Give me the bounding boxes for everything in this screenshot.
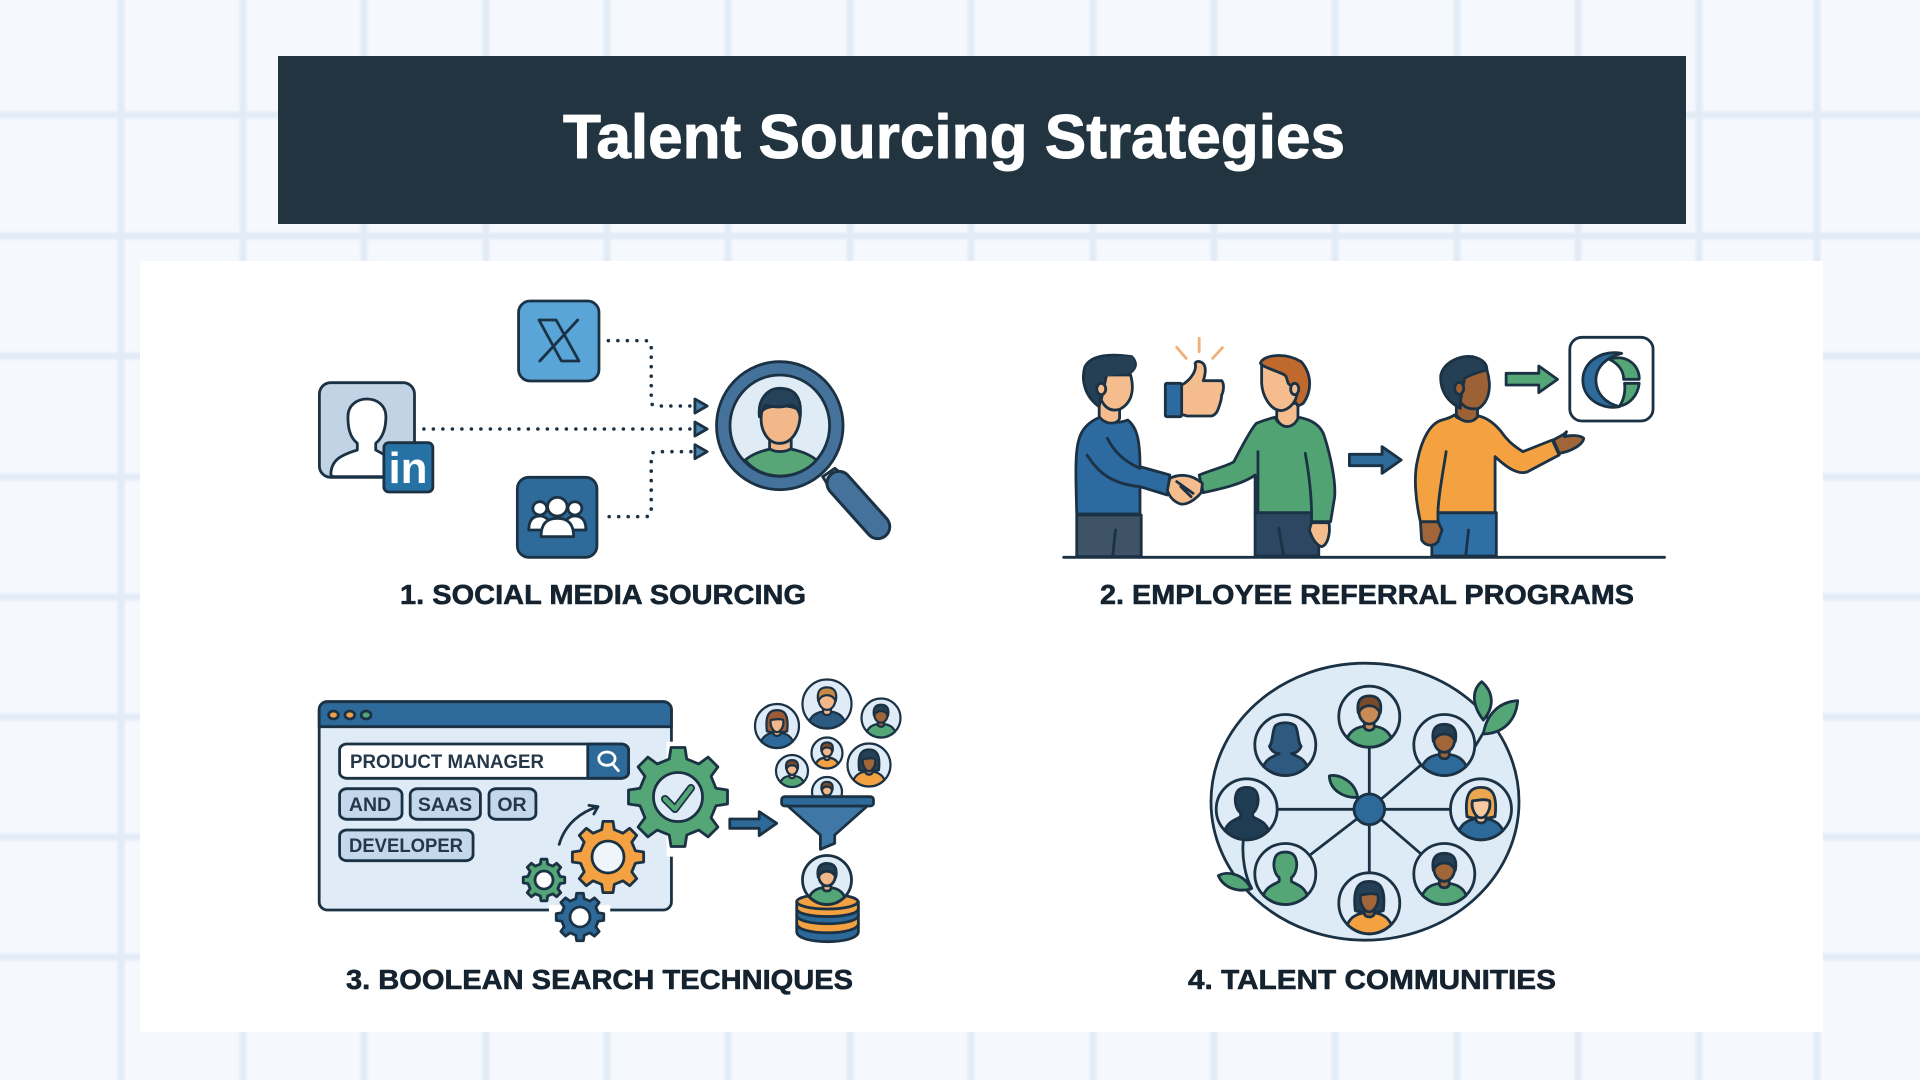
illustration: referral handshake <box>1064 337 1664 557</box>
ground line <box>1064 556 1664 559</box>
icon: LinkedIn badge <box>384 443 433 492</box>
boolean tag boxes <box>340 789 536 861</box>
network circle <box>1211 663 1519 940</box>
person: new hire <box>1415 356 1584 556</box>
candidate pool avatars <box>755 680 900 807</box>
LinkedIn glyph: in <box>388 444 428 493</box>
search box <box>340 744 629 778</box>
panel: talent communities <box>1188 663 1556 995</box>
white content panel <box>140 261 1823 1032</box>
gear: green check <box>628 748 728 846</box>
icon: X card <box>519 301 599 381</box>
arrow: blue <box>730 812 777 836</box>
label 2: 2. EMPLOYEE REFERRAL PROGRAMS <box>1100 579 1634 610</box>
leaves <box>1218 682 1518 890</box>
illustration: browser search window <box>319 702 777 914</box>
boolean tag text: AND <box>349 794 391 816</box>
title: Talent Sourcing Strategies <box>563 103 1345 172</box>
gear: blue <box>556 893 604 941</box>
illustration: sources feeding a magnifier <box>319 301 878 557</box>
gear: small green <box>523 859 565 901</box>
label 4: 4. TALENT COMMUNITIES <box>1188 964 1556 995</box>
person: referrer <box>1076 355 1170 557</box>
boolean tag text: DEVELOPER <box>349 835 463 857</box>
icon: profile card <box>319 383 414 477</box>
icon: magnifier with candidate <box>717 362 878 527</box>
hub <box>1354 794 1385 825</box>
boolean tag text <box>349 751 544 857</box>
person: employee <box>1199 355 1335 556</box>
arrow: green <box>1506 366 1558 393</box>
boolean tag text: OR <box>497 794 527 816</box>
label 1: 1. SOCIAL MEDIA SOURCING <box>400 579 806 610</box>
boolean tag text: PRODUCT MANAGER <box>350 751 544 773</box>
funnel <box>782 797 873 849</box>
icon: handshake <box>1167 475 1202 504</box>
icon: thumbs up <box>1165 338 1223 417</box>
dotted connector arrows <box>424 341 707 517</box>
label 3: 3. BOOLEAN SEARCH TECHNIQUES <box>346 964 853 995</box>
boolean tag text: SAAS <box>418 794 472 816</box>
panel: boolean search techniques <box>319 680 900 995</box>
title banner <box>278 56 1686 224</box>
database stack <box>797 894 858 942</box>
process arrow <box>559 805 598 844</box>
browser window <box>319 702 678 914</box>
icon: company logo <box>1570 337 1653 421</box>
community avatars <box>1216 686 1512 934</box>
gear: orange <box>572 821 644 893</box>
illustration: community network <box>1211 663 1519 940</box>
icon: community card <box>517 477 597 557</box>
gears <box>523 748 728 941</box>
selected candidate avatar <box>802 856 852 904</box>
network spokes <box>1247 717 1481 903</box>
panel: social media sourcing <box>319 301 878 610</box>
panel: employee referral programs <box>1064 337 1664 610</box>
arrow: blue <box>1349 447 1401 473</box>
